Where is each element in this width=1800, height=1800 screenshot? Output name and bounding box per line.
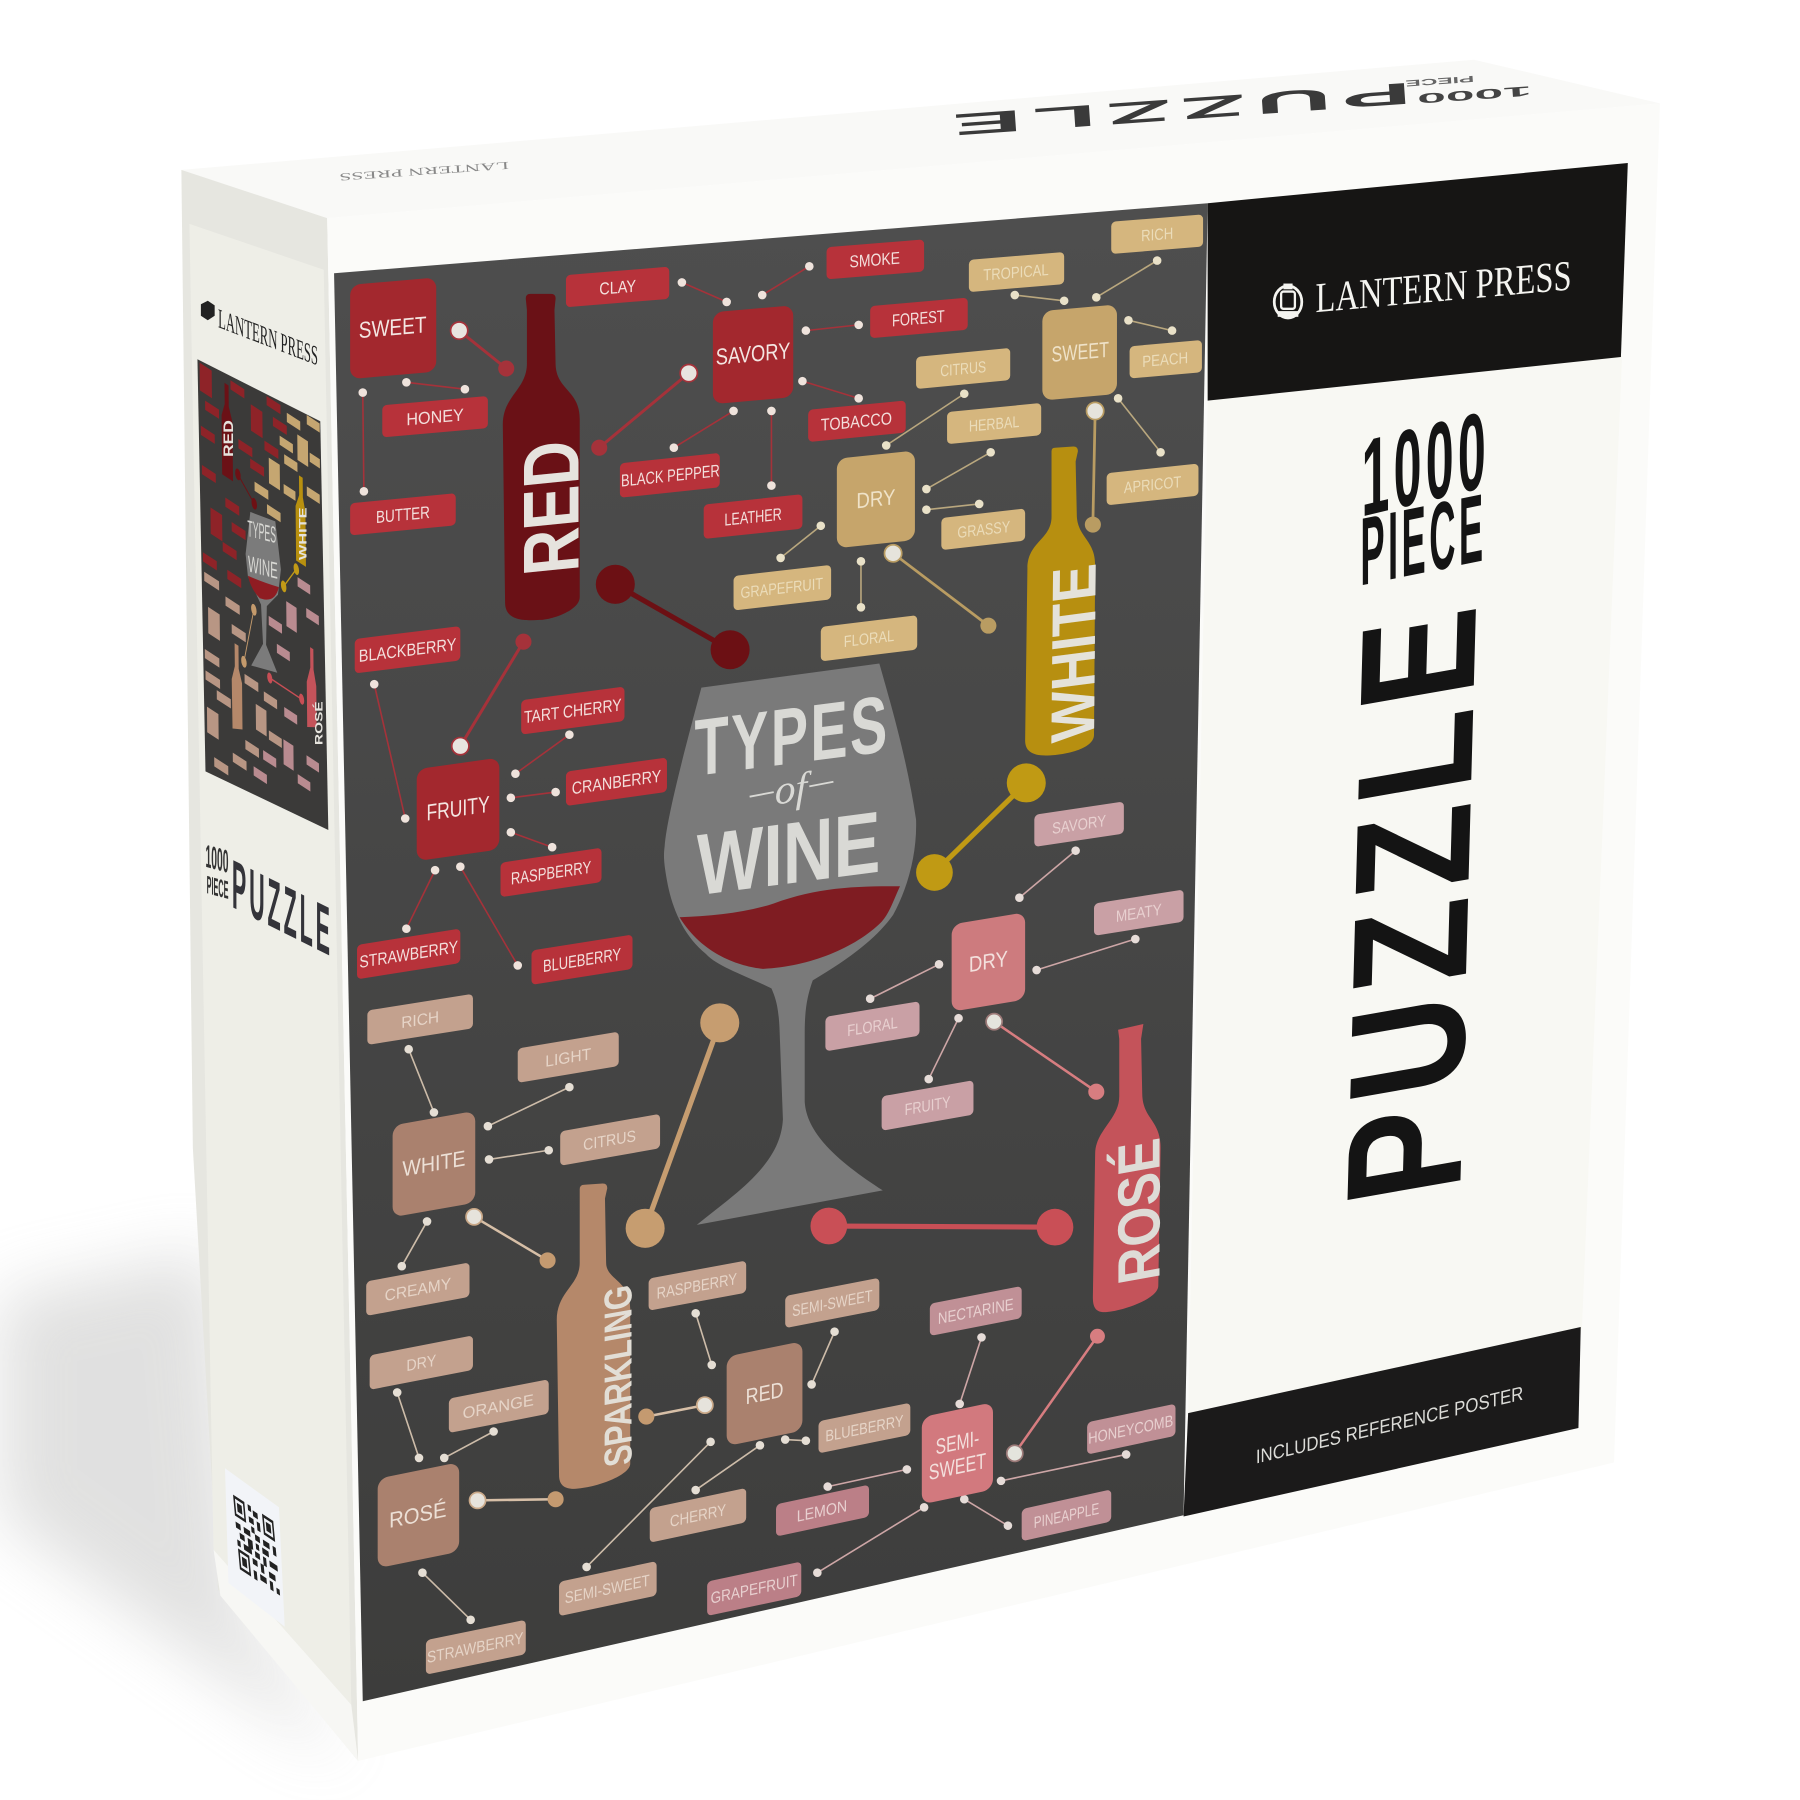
label: blackberry: BLACKBERRY [359, 634, 457, 666]
label: semi-sweet: SEMI-SWEET [565, 1572, 650, 1607]
label: dry: DRY [406, 1352, 436, 1375]
red family labels [350, 239, 968, 985]
label: rich [367, 994, 473, 1045]
box left side face: PUZZLE [232, 846, 333, 972]
red links [363, 266, 859, 965]
label: pineapple [1022, 1489, 1111, 1541]
connector: sparkling bottle to glass [626, 1003, 739, 1248]
label: rich: RICH [401, 1008, 439, 1032]
label: cranberry: CRANBERRY [572, 766, 662, 798]
label: fruity [882, 1080, 973, 1131]
label: citrus: CITRUS [940, 358, 986, 380]
white wine links [781, 261, 1172, 634]
label: floral [821, 615, 917, 661]
box: dry: DRY [969, 946, 1008, 977]
label: butter: BUTTER [376, 502, 430, 527]
red bottle label: RED [507, 437, 596, 579]
top face: 1000 upside down: 1000 [1417, 83, 1532, 107]
label: savory [1034, 801, 1124, 847]
label: honeycomb [1087, 1404, 1176, 1455]
label: grassy [941, 508, 1025, 550]
label: blackberry [355, 626, 460, 673]
label: rich: RICH [1141, 225, 1173, 245]
box left side face: LANTERN PRESS [218, 304, 318, 372]
white family labels [734, 214, 1203, 661]
label: forest: FOREST [892, 306, 945, 330]
label: tart cherry [521, 687, 624, 735]
box: dry [952, 912, 1025, 1012]
label: honey [382, 396, 488, 437]
mini poster text: white: WHITE [298, 507, 310, 560]
label: apricot: APRICOT [1124, 473, 1181, 497]
label: floral: FLORAL [844, 627, 894, 651]
box: fruity [417, 758, 499, 861]
label: meaty [1094, 889, 1184, 936]
label: honey: HONEY [406, 404, 464, 429]
side mini poster [197, 345, 328, 838]
label: floral [825, 1001, 920, 1051]
label: peach [1130, 340, 1202, 378]
label: apricot [1107, 464, 1198, 505]
label: clay: CLAY [599, 276, 636, 299]
label: leather: LEATHER [724, 504, 782, 530]
box: red: RED [746, 1377, 783, 1409]
label: black pepper [620, 453, 720, 498]
label: blueberry [818, 1403, 910, 1453]
label: cherry [650, 1488, 746, 1543]
label: fruity: FRUITY [905, 1093, 951, 1119]
footer text: INCLUDES REFERENCE POSTER [1256, 1383, 1523, 1469]
white bottle [1025, 447, 1110, 756]
box: sweet: SWEET [359, 311, 426, 343]
box: white: WHITE [402, 1146, 465, 1181]
label: semi-sweet [559, 1561, 657, 1616]
box: semi-sweet: SEMI- [936, 1425, 979, 1459]
label: meaty: MEATY [1116, 901, 1162, 926]
label: light: LIGHT [545, 1045, 591, 1071]
label: strawberry [357, 929, 460, 979]
connector: red bottle to glass [596, 565, 750, 669]
label: citrus [560, 1114, 660, 1166]
label: pineapple: PINEAPPLE [1034, 1500, 1099, 1532]
box: red [727, 1341, 802, 1446]
title: wine: WINE [697, 793, 880, 914]
label: honeycomb: HONEYCOMB [1088, 1412, 1173, 1448]
title: of [750, 763, 833, 814]
sparkling family labels [366, 994, 910, 1675]
label: forest [870, 298, 968, 338]
label: creamy [366, 1262, 470, 1316]
box: savory: SAVORY [716, 337, 790, 370]
label: strawberry: STRAWBERRY [359, 936, 458, 972]
label: strawberry: STRAWBERRY [427, 1629, 524, 1667]
label: strawberry [426, 1620, 526, 1675]
mini poster text: rose: ROSÉ [313, 701, 326, 745]
box top face [181, 60, 1660, 218]
label: rich [1111, 214, 1203, 254]
label: raspberry [649, 1260, 746, 1311]
label: leather [704, 494, 802, 539]
sparkling links [397, 1049, 835, 1620]
white sleeve panel [1188, 356, 1622, 1415]
box: dry: DRY [856, 484, 896, 513]
label: nectarine [930, 1286, 1022, 1336]
label: tart cherry: TART CHERRY [524, 694, 622, 727]
rose links [817, 851, 1135, 1573]
puzzle heading: PUZZLE [1312, 586, 1512, 1215]
label: semi-sweet [785, 1278, 879, 1328]
box left side face: PIECE [207, 871, 228, 905]
rose bottle label: ROSÉ [1105, 1134, 1172, 1289]
box: white [393, 1111, 475, 1217]
label: lemon [776, 1485, 869, 1537]
side mini poster: WINE [248, 551, 278, 584]
label: raspberry: RASPBERRY [657, 1270, 737, 1303]
top face: lantern press upside down: LANTERN PRESS [339, 159, 509, 182]
label: grapefruit [734, 565, 831, 610]
label: orange [449, 1379, 549, 1433]
box shadow [0, 1251, 344, 1762]
sparkling bottle label: SPARKLING [597, 1282, 640, 1470]
title: types: TYPES [695, 679, 890, 794]
label: tobacco [808, 400, 906, 442]
side logo: lantern icon [201, 301, 215, 320]
label: blueberry [532, 934, 633, 985]
box: sweet [350, 277, 436, 379]
label: raspberry: RASPBERRY [511, 857, 592, 889]
box left side face: PIECE [1360, 473, 1487, 606]
label: tropical [969, 252, 1064, 292]
poster panel [334, 203, 1208, 1701]
label: lemon: LEMON [797, 1497, 847, 1526]
connector: rose bottle to glass [810, 1208, 1073, 1246]
label: savory: SAVORY [1052, 812, 1106, 838]
label: citrus [916, 348, 1010, 389]
label: semi-sweet: SEMI-SWEET [792, 1287, 873, 1320]
label: orange: ORANGE [463, 1391, 534, 1423]
label: clay [566, 267, 669, 307]
label: grapefruit: GRAPEFRUIT [711, 1571, 798, 1608]
box: fruity: FRUITY [426, 791, 490, 826]
label: blueberry: BLUEBERRY [825, 1412, 904, 1446]
box left side face: 1000 [205, 837, 228, 880]
label: cranberry [566, 757, 667, 806]
top face: piece upside down: PIECE [1405, 73, 1475, 88]
label: citrus: CITRUS [583, 1127, 636, 1154]
label: black pepper: BLACK PEPPER [621, 460, 720, 491]
rose bottle [1093, 1024, 1172, 1312]
rose family labels [707, 801, 1184, 1616]
box: savory [713, 305, 793, 404]
label: herbal [947, 403, 1041, 444]
black brand band [1208, 163, 1628, 401]
label: tropical: TROPICAL [983, 261, 1049, 285]
red bottle [503, 294, 596, 620]
icon: lantern [1274, 284, 1302, 318]
label: dry [370, 1335, 473, 1390]
mini poster text: red: RED [221, 420, 236, 457]
white bottle label: WHITE [1039, 561, 1110, 745]
label: light [518, 1032, 619, 1083]
box left side face: 1000 [1361, 388, 1490, 540]
side: QR code [225, 1468, 285, 1627]
sparkling bottle [557, 1184, 640, 1489]
label: butter [350, 493, 456, 535]
label: smoke: SMOKE [849, 248, 900, 272]
box left side face [181, 103, 1660, 1761]
wine glass [664, 664, 916, 1225]
label: grapefruit: GRAPEFRUIT [740, 575, 823, 602]
black footer band [1184, 1327, 1581, 1516]
box: sweet: SWEET [1052, 337, 1109, 367]
box front face [327, 103, 1660, 1761]
label: floral: FLORAL [847, 1014, 898, 1040]
label: peach: PEACH [1142, 349, 1188, 371]
connector: white bottle to glass [916, 763, 1046, 891]
title: of: of [775, 763, 812, 814]
label: creamy: CREAMY [385, 1275, 451, 1305]
label: herbal: HERBAL [969, 413, 1019, 436]
brand name: LANTERN PRESS [1316, 252, 1572, 322]
box: semi-sweet: SWEET [929, 1448, 986, 1485]
top face: puzzle wordmark upside down: PUZZLE [941, 76, 1413, 142]
box: sweet [1042, 304, 1117, 401]
box: rose [378, 1462, 459, 1568]
label: grapefruit [707, 1562, 801, 1616]
box: dry [837, 450, 915, 548]
label: grassy: GRASSY [957, 518, 1010, 542]
label: cherry: CHERRY [670, 1501, 726, 1531]
box: rose: ROSÉ [389, 1497, 447, 1533]
label: smoke [827, 239, 924, 279]
box: semi-sweet [922, 1402, 993, 1505]
label: nectarine: NECTARINE [938, 1295, 1014, 1328]
label: blueberry: BLUEBERRY [543, 944, 621, 976]
label: tobacco: TOBACCO [821, 408, 892, 435]
label: raspberry [501, 848, 602, 897]
wine fill [680, 886, 900, 969]
side mini poster: TYPES [247, 515, 276, 548]
